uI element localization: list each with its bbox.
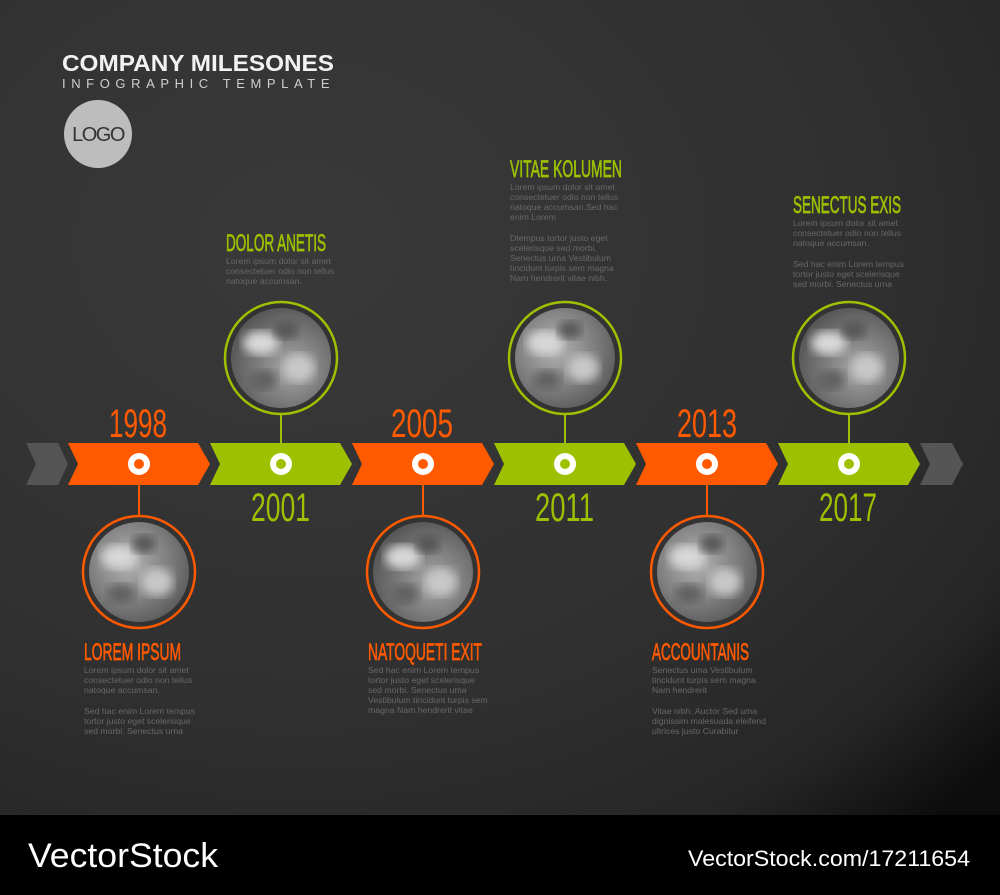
title <box>62 50 334 91</box>
icon: logo <box>64 100 132 168</box>
milestone 2001: Lorem ipsum dolor sit amet <box>226 256 331 266</box>
milestone 2011: enim Lorem <box>510 212 556 222</box>
milestone 2005 <box>367 402 488 715</box>
milestone 2005: tortor justo eget scelerisque <box>368 675 475 685</box>
milestone 2017: consectetuer odio non tellus <box>793 228 902 238</box>
milestone 2011: tincidunt turpis sem magna <box>510 263 614 273</box>
milestone 2001: natoque accumsan. <box>226 276 302 286</box>
milestone 2001: consectetuer odio non tellus <box>226 266 335 276</box>
footer: VectorStock.com/17211654 <box>688 846 970 871</box>
milestone 2011: VITAE KOLUMEN <box>510 156 622 183</box>
milestone 2013: Senectus uma Vestibulum <box>652 665 752 675</box>
milestone 2013: dignissim malesuada eleifend <box>652 716 766 726</box>
milestone 1998: 1998 <box>109 402 167 446</box>
milestone 1998: Sed hac enim Lorem tempus <box>84 706 196 716</box>
milestone 2011: 2011 <box>535 486 594 530</box>
milestone 1998: natoque accumsan. <box>84 685 160 695</box>
milestone 2011: Lorem ipsum dolor sit amet <box>510 182 615 192</box>
milestone 2017: natoque accumsan. <box>793 238 869 248</box>
milestone 2005: NATOQUETI EXIT <box>368 639 482 666</box>
milestone 1998: tortor justo eget scelerisque <box>84 716 191 726</box>
milestone 2017: sed morbi. Senectus urna <box>793 279 892 289</box>
milestone 2005: Vestibulum tincidunt turpis sem <box>368 695 488 705</box>
milestone 2013: Nam hendrerit <box>652 685 708 695</box>
footer <box>0 815 1000 895</box>
milestone 2001 <box>225 230 337 530</box>
milestone 2005: Sed hac enim Lorem tempus <box>368 665 480 675</box>
milestone 1998: LOREM IPSUM <box>84 639 181 666</box>
milestone 1998: consectetuer odio non tellus <box>84 675 193 685</box>
milestone 2005: magna Nam hendrerit vitae <box>368 705 473 715</box>
milestone 2011: natoque accumsan.Sed hac <box>510 202 618 212</box>
milestone 2011: Dtempus tortor justo eget <box>510 233 608 243</box>
milestone 2013 <box>651 402 766 736</box>
milestone 2001: 2001 <box>251 486 310 530</box>
milestone 2011: consectetuer odio non tellus <box>510 192 619 202</box>
milestone 2005: sed morbi. Senectus uma <box>368 685 467 695</box>
milestone 2017: Sed hac enim Lorem tempus <box>793 259 905 269</box>
milestone 2011: Nam hendrerit vitae nibh. <box>510 273 607 283</box>
milestone 2011 <box>509 156 622 530</box>
milestone 2001: DOLOR ANETIS <box>226 230 326 257</box>
milestone 2011: scelerisque sed morbi. <box>510 243 597 253</box>
milestone 1998: sed morbi. Senectus urna <box>84 726 183 736</box>
milestone 1998: Lorem ipsum dolor sit amet <box>84 665 189 675</box>
milestone 2013: 2013 <box>677 402 737 446</box>
milestone 2017: Lorem ipsum dolor sit amet <box>793 218 898 228</box>
title: COMPANY MILESONES <box>62 50 334 76</box>
milestone 2017 <box>793 192 905 530</box>
milestone 1998 <box>83 402 196 736</box>
milestone 2013: ACCOUNTANIS <box>652 639 749 666</box>
milestone 2005: 2005 <box>391 402 453 446</box>
milestone 2017: tortor justo eget scelerisque <box>793 269 900 279</box>
milestone 2013: tincidunt turpis sem magna <box>652 675 756 685</box>
milestone 2011: Senectus urna Vestibulum <box>510 253 611 263</box>
milestone 2013: Vitae nibh. Auctor Sed uma <box>652 706 757 716</box>
milestone 2013: ultrices justo Curabitur <box>652 726 739 736</box>
timeline bar <box>26 443 963 485</box>
milestone 2017: SENECTUS EXIS <box>793 192 901 219</box>
title: INFOGRAPHIC TEMPLATE <box>62 76 334 91</box>
footer: VectorStock <box>28 837 219 875</box>
milestone 2017: 2017 <box>819 486 877 530</box>
icon: logo: LOGO <box>72 124 125 146</box>
